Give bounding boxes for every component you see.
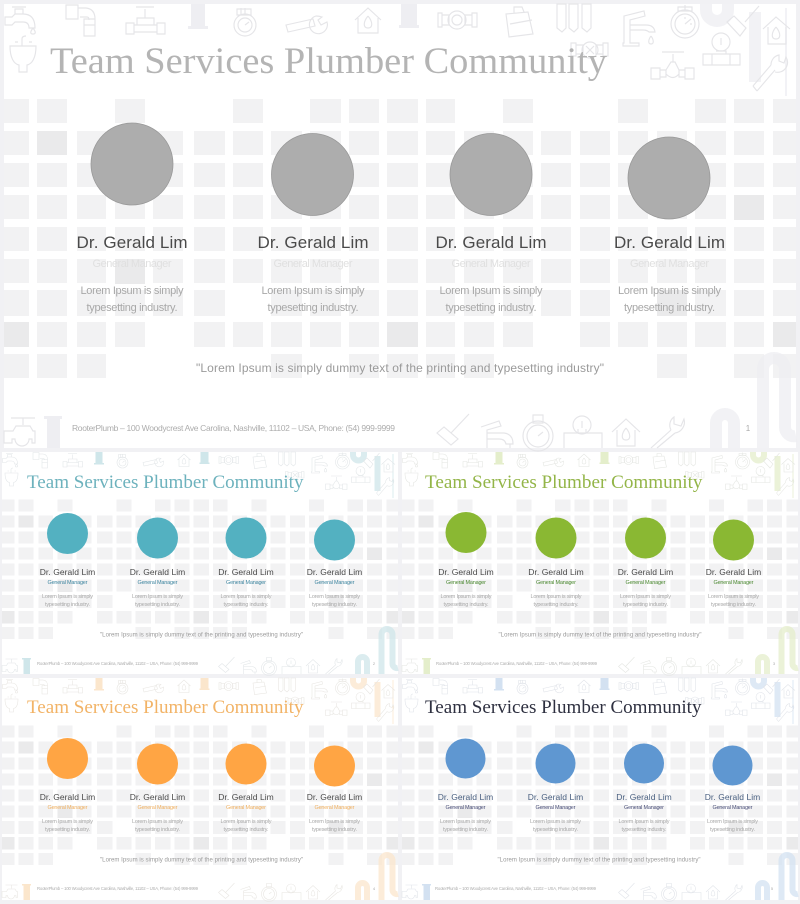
profile circles <box>446 738 752 786</box>
team member 2: typesetting industry. <box>135 827 180 833</box>
team member 2 <box>130 567 185 608</box>
slide background with tile grid <box>2 452 398 674</box>
pipe decorations <box>422 452 798 674</box>
team member 4: General Manager <box>630 258 709 270</box>
team member 2: General Manager <box>138 580 178 586</box>
team member 1: Dr. Gerald Lim <box>76 233 188 252</box>
team member 2: General Manager <box>274 258 353 270</box>
team member 2 <box>130 792 185 833</box>
team member 4 <box>307 792 362 833</box>
team member 3 <box>616 792 672 833</box>
pipe decorations <box>44 4 796 448</box>
team member 4: General Manager <box>314 805 355 811</box>
team member 1 <box>438 792 493 833</box>
team member 1: typesetting industry. <box>45 827 90 833</box>
team member 4: typesetting industry. <box>312 602 357 608</box>
profile circles <box>47 513 355 560</box>
pipe decorations <box>22 678 398 900</box>
team member 1: Dr. Gerald Lim <box>438 792 493 802</box>
quote: "Lorem Ipsum is simply dummy text of the printing and typesetting industry" <box>100 858 303 864</box>
slide background with tile grid <box>4 4 796 448</box>
page number: 5 <box>771 886 774 891</box>
slide background with tile grid <box>402 678 798 900</box>
title: Team Services Plumber Community <box>425 473 703 493</box>
team member 2: Dr. Gerald Lim <box>258 233 368 252</box>
team member 3: General Manager <box>226 805 266 811</box>
team member 4: General Manager <box>714 580 754 586</box>
plumbing line icons <box>2 452 395 676</box>
page number: 4 <box>373 886 376 891</box>
team member 4: Lorem Ipsum is simply <box>707 819 758 825</box>
team member 2: Dr. Gerald Lim <box>130 567 185 577</box>
team member 4: Dr. Gerald Lim <box>706 567 761 577</box>
team member 2: Lorem Ipsum is simply <box>530 819 581 825</box>
team member 1 <box>438 567 494 608</box>
team member 1: Dr. Gerald Lim <box>438 567 494 577</box>
quote: "Lorem Ipsum is simply dummy text of the printing and typesetting industry" <box>196 361 604 375</box>
quote: "Lorem Ipsum is simply dummy text of the printing and typesetting industry" <box>100 632 303 638</box>
team member 3: General Manager <box>624 805 664 811</box>
footer address: RooterPlumb – 100 Woodycrest Ave Carolina, Nashville, 11102 – USA, Phone: (54) 999-9999 <box>436 661 598 666</box>
team member 2: Lorem Ipsum is simply <box>530 594 582 600</box>
team member 4 <box>307 567 362 608</box>
footer address: RooterPlumb – 100 Woodycrest Ave Carolina, Nashville, 11102 – USA, Phone: (54) 999-9999 <box>37 661 199 666</box>
team member 2: Lorem Ipsum is simply <box>262 285 365 297</box>
team member 1: typesetting industry. <box>443 827 488 833</box>
team member 1: Lorem Ipsum is simply <box>80 285 184 297</box>
title: Team Services Plumber Community <box>27 473 304 493</box>
team member 2: Lorem Ipsum is simply <box>132 819 183 825</box>
team member 4: Dr. Gerald Lim <box>614 233 725 252</box>
page number: 2 <box>373 661 376 666</box>
team member 3: typesetting industry. <box>446 302 536 314</box>
team member 4 <box>614 233 725 314</box>
team member 2: General Manager <box>536 805 576 811</box>
team member 3: Dr. Gerald Lim <box>218 792 274 802</box>
team member 3: General Manager <box>452 258 531 270</box>
team member 2: Dr. Gerald Lim <box>130 792 185 802</box>
team member 2: typesetting industry. <box>533 827 578 833</box>
team member 4: typesetting industry. <box>312 827 357 833</box>
team member 3: Lorem Ipsum is simply <box>220 594 272 600</box>
profile circles <box>446 512 754 560</box>
team member 2: General Manager <box>138 805 178 811</box>
panel: orange slide <box>2 678 398 902</box>
team member 1 <box>40 567 95 608</box>
team member 3: Lorem Ipsum is simply <box>618 819 670 825</box>
team member 4: Lorem Ipsum is simply <box>618 285 722 297</box>
team member 3 <box>436 233 546 314</box>
team member 1: General Manager <box>48 805 88 811</box>
team member 4: typesetting industry. <box>711 602 756 608</box>
team member 1 <box>40 792 95 833</box>
team member 3: Dr. Gerald Lim <box>436 233 546 252</box>
team member 2: typesetting industry. <box>135 602 180 608</box>
team member 3: General Manager <box>226 580 266 586</box>
team member 4: Dr. Gerald Lim <box>307 792 362 802</box>
quote: "Lorem Ipsum is simply dummy text of the printing and typesetting industry" <box>498 858 700 864</box>
team member 4: Lorem Ipsum is simply <box>708 594 759 600</box>
team member 1: Lorem Ipsum is simply <box>440 594 492 600</box>
team member 1: typesetting industry. <box>86 302 178 314</box>
panel: green slide <box>402 452 798 676</box>
team member 3: Lorem Ipsum is simply <box>620 594 671 600</box>
pipe decorations <box>22 452 398 674</box>
team member 3: typesetting industry. <box>224 827 269 833</box>
team member 1: Dr. Gerald Lim <box>40 792 95 802</box>
team member 1: typesetting industry. <box>444 602 489 608</box>
plumbing line icons <box>2 678 395 902</box>
title: Team Services Plumber Community <box>50 41 608 82</box>
slide background with tile grid <box>402 452 798 674</box>
team member 4: General Manager <box>712 805 753 811</box>
team member 1: Lorem Ipsum is simply <box>42 594 93 600</box>
team member 4 <box>706 567 761 608</box>
panel: blue slide <box>402 678 798 902</box>
pipe decorations <box>422 678 798 900</box>
team member 3: Dr. Gerald Lim <box>616 792 672 802</box>
team member 2 <box>528 567 584 608</box>
team member 2 <box>528 792 583 833</box>
team member 3: Lorem Ipsum is simply <box>440 285 543 297</box>
plumbing line icons <box>402 452 795 676</box>
team member 4: Dr. Gerald Lim <box>705 792 760 802</box>
team member 3: Dr. Gerald Lim <box>218 567 274 577</box>
team member 1: General Manager <box>446 805 486 811</box>
team member 1: General Manager <box>446 580 486 586</box>
panel: large gray slide <box>4 4 796 451</box>
team member 2: Dr. Gerald Lim <box>528 567 584 577</box>
team member 3 <box>218 792 274 833</box>
team member 1: Lorem Ipsum is simply <box>42 819 93 825</box>
page number: 1 <box>746 424 751 433</box>
team member 3: Lorem Ipsum is simply <box>220 819 272 825</box>
team member 4: typesetting industry. <box>710 827 755 833</box>
team member 3: typesetting industry. <box>224 602 269 608</box>
title: Team Services Plumber Community <box>27 698 304 718</box>
profile circles <box>47 738 355 786</box>
footer address: RooterPlumb – 100 Woodycrest Ave Carolina, Nashville, 11102 – USA, Phone: (54) 999-9999 <box>435 886 597 891</box>
team member 1: General Manager <box>92 258 172 270</box>
team member 4: Dr. Gerald Lim <box>307 567 362 577</box>
team member 4: typesetting industry. <box>624 302 715 314</box>
team member 1: General Manager <box>48 580 88 586</box>
plumbing line icons <box>4 4 790 451</box>
team member 4 <box>705 792 760 833</box>
team member 2: typesetting industry. <box>534 602 579 608</box>
panel: teal slide <box>2 452 398 676</box>
team member 2: Dr. Gerald Lim <box>528 792 583 802</box>
profile circles <box>91 123 710 219</box>
team member 1: Lorem Ipsum is simply <box>440 819 491 825</box>
plumbing line icons <box>402 678 795 902</box>
quote: "Lorem Ipsum is simply dummy text of the printing and typesetting industry" <box>498 632 702 638</box>
footer address: RooterPlumb – 100 Woodycrest Ave Carolina, Nashville, 11102 – USA, Phone: (54) 999-9999 <box>37 886 199 891</box>
team member 2: typesetting industry. <box>268 302 358 314</box>
team member 3: typesetting industry. <box>623 602 668 608</box>
team member 3 <box>618 567 673 608</box>
team member 4: General Manager <box>314 580 355 586</box>
team member 3: Dr. Gerald Lim <box>618 567 673 577</box>
page number: 3 <box>773 661 776 666</box>
title: Team Services Plumber Community <box>425 698 702 718</box>
team member 3: General Manager <box>626 580 666 586</box>
team member 1: typesetting industry. <box>45 602 90 608</box>
team member 4: Lorem Ipsum is simply <box>309 594 360 600</box>
slide background with tile grid <box>2 678 398 900</box>
team member 1 <box>76 233 188 314</box>
team member 1: Dr. Gerald Lim <box>40 567 95 577</box>
team member 4: Lorem Ipsum is simply <box>309 819 360 825</box>
footer address: RooterPlumb – 100 Woodycrest Ave Carolina, Nashville, 11102 – USA, Phone: (54) 999-9999 <box>72 423 395 433</box>
team member 2: Lorem Ipsum is simply <box>132 594 183 600</box>
team member 3: typesetting industry. <box>622 827 667 833</box>
team member 2: General Manager <box>536 580 576 586</box>
team member 2 <box>258 233 368 314</box>
team member 3 <box>218 567 274 608</box>
